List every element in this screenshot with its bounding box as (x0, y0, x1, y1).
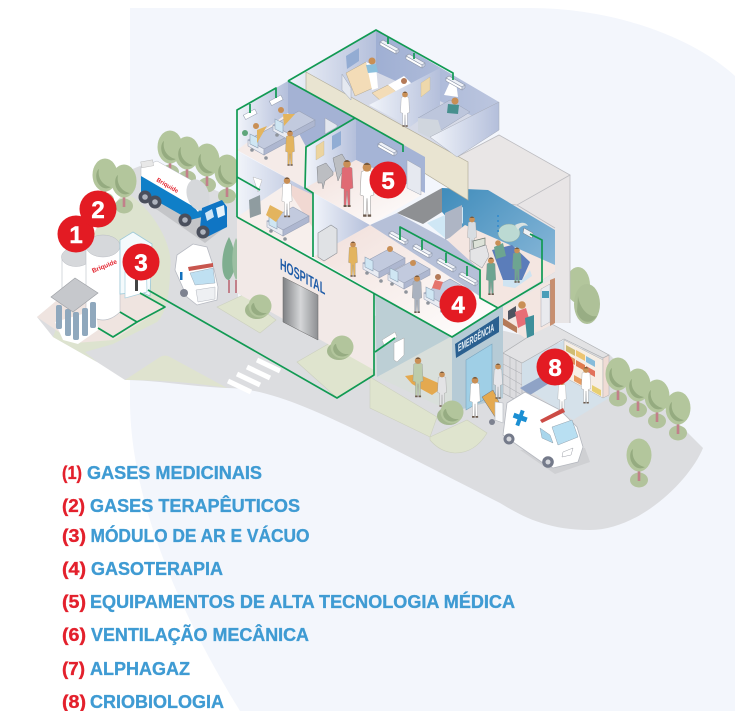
roof (503, 323, 609, 363)
surgeons (468, 216, 476, 252)
beds (363, 249, 405, 283)
legend item 5: (5) (62, 592, 86, 612)
small ambulance (175, 244, 218, 305)
storage tanks (51, 232, 152, 344)
shelves (564, 340, 603, 398)
operating room (397, 188, 555, 308)
hospital facade (237, 217, 374, 370)
ceiling line dots (497, 215, 499, 232)
end wall (603, 355, 609, 398)
marker 1 (58, 216, 94, 252)
tank 1 (62, 248, 90, 302)
surgical lamp (498, 223, 528, 242)
floor (306, 62, 499, 157)
bed 1 (342, 58, 378, 100)
legend item 3: (3) (62, 526, 86, 546)
hospital sign: HOSPITAL (280, 255, 325, 299)
logo: Air Liquide: Briquide (155, 178, 180, 195)
sockets (243, 95, 283, 120)
picture (346, 48, 359, 69)
monitor stand (249, 195, 261, 218)
partition (369, 68, 440, 127)
wall cabinet (394, 338, 404, 362)
legend item 2: GASES TERAPÊUTICOS (90, 495, 300, 516)
staff with stretcher (482, 390, 503, 417)
tank 2: Briquide (91, 258, 119, 275)
wall outlet (382, 332, 397, 345)
office room (503, 278, 555, 338)
marker 2 (80, 190, 116, 228)
lawn: median triangle (125, 356, 227, 388)
legend item 5: EQUIPAMENTOS DE ALTA TECNOLOGIA MÉDICA (90, 591, 515, 612)
floor (522, 376, 609, 420)
door (407, 160, 421, 195)
cross (511, 408, 529, 428)
picture 2 (421, 77, 430, 97)
right rear building (425, 135, 570, 323)
module 3 (120, 232, 152, 298)
back left wall (288, 30, 376, 100)
nurse (400, 92, 410, 127)
right wall (430, 102, 499, 157)
plaza: under tanks (37, 290, 165, 343)
lawn: hospital front right (297, 343, 375, 398)
pictures (316, 141, 324, 160)
wall monitor (523, 228, 533, 238)
staff (348, 242, 358, 277)
wall units (380, 40, 465, 90)
lawn: around tanks (53, 192, 171, 362)
lawn: hospital front left (217, 295, 276, 333)
legend item 1: (1) (62, 463, 82, 483)
legend item 6: (6) (62, 625, 86, 645)
truck cab (200, 200, 227, 238)
room 5 (305, 118, 425, 225)
legend item 4: (4) (62, 559, 86, 579)
legend item 2: (2) (62, 496, 85, 516)
pharmacy room (503, 323, 609, 420)
door (466, 344, 492, 410)
marker 5: 5 (381, 168, 395, 195)
lawn: emergency door (430, 420, 487, 453)
marker 3: 3 (134, 250, 148, 277)
lower left room (237, 151, 313, 257)
marker 1: 1 (69, 222, 83, 249)
monitor (473, 238, 485, 249)
legend item 4: GASOTERAPIA (91, 559, 223, 579)
lawn: emergency front (370, 377, 437, 437)
legend item 6: VENTILAÇÃO MECÂNICA (91, 624, 309, 645)
door (325, 118, 337, 134)
operating table (492, 245, 530, 280)
legend (62, 463, 515, 711)
oxygen wall units (389, 231, 478, 286)
trees right of building (566, 267, 600, 324)
legend item 3: MÓDULO DE AR E VÁCUO (90, 525, 310, 546)
beige long wall (306, 72, 468, 200)
upper left room (237, 81, 355, 188)
stretcher (405, 374, 445, 395)
portico (51, 278, 98, 344)
left tile wall (503, 353, 522, 403)
back right wall (376, 30, 499, 128)
staff (581, 367, 591, 404)
filing cabinet (318, 225, 337, 261)
marker 4 (440, 286, 476, 322)
emergency entrance room (375, 295, 452, 412)
cypress trees (222, 237, 240, 293)
bushes (245, 294, 464, 425)
beacon (540, 408, 565, 423)
left rooms (237, 81, 355, 257)
chairs (317, 154, 349, 189)
wall unit (378, 142, 397, 156)
back wall (522, 340, 564, 390)
ward room 4 (313, 193, 498, 337)
marker 8: 8 (548, 355, 562, 382)
marker 5 (370, 162, 406, 198)
trolley (470, 245, 489, 268)
ground and roads (37, 162, 703, 530)
crosswalk (228, 360, 280, 392)
big ambulance (495, 392, 590, 474)
marker 2: 2 (91, 197, 105, 224)
small plant (242, 130, 248, 136)
gas pipelines (98, 30, 542, 398)
emergency facade (452, 306, 503, 425)
sign: EMERGÊNCIA (458, 321, 494, 355)
trees right row (606, 358, 690, 488)
legend item 1: GASES MEDICINAIS (87, 463, 262, 483)
legend item 7: ALPHAGAZ (90, 659, 190, 679)
bed 2 (372, 76, 412, 102)
marker 4: 4 (451, 292, 465, 319)
marker 3 (122, 244, 160, 280)
marker 8 (536, 348, 574, 386)
upper floor block (288, 30, 499, 200)
light (444, 82, 458, 97)
entrance door (283, 277, 318, 340)
beds (248, 126, 290, 160)
bed 3 (418, 98, 470, 139)
patients (387, 246, 393, 252)
legend item 7: (7) (62, 659, 85, 679)
tanker truck (138, 160, 228, 243)
trees behind truck (92, 130, 240, 214)
doctor and visitor (341, 160, 353, 207)
